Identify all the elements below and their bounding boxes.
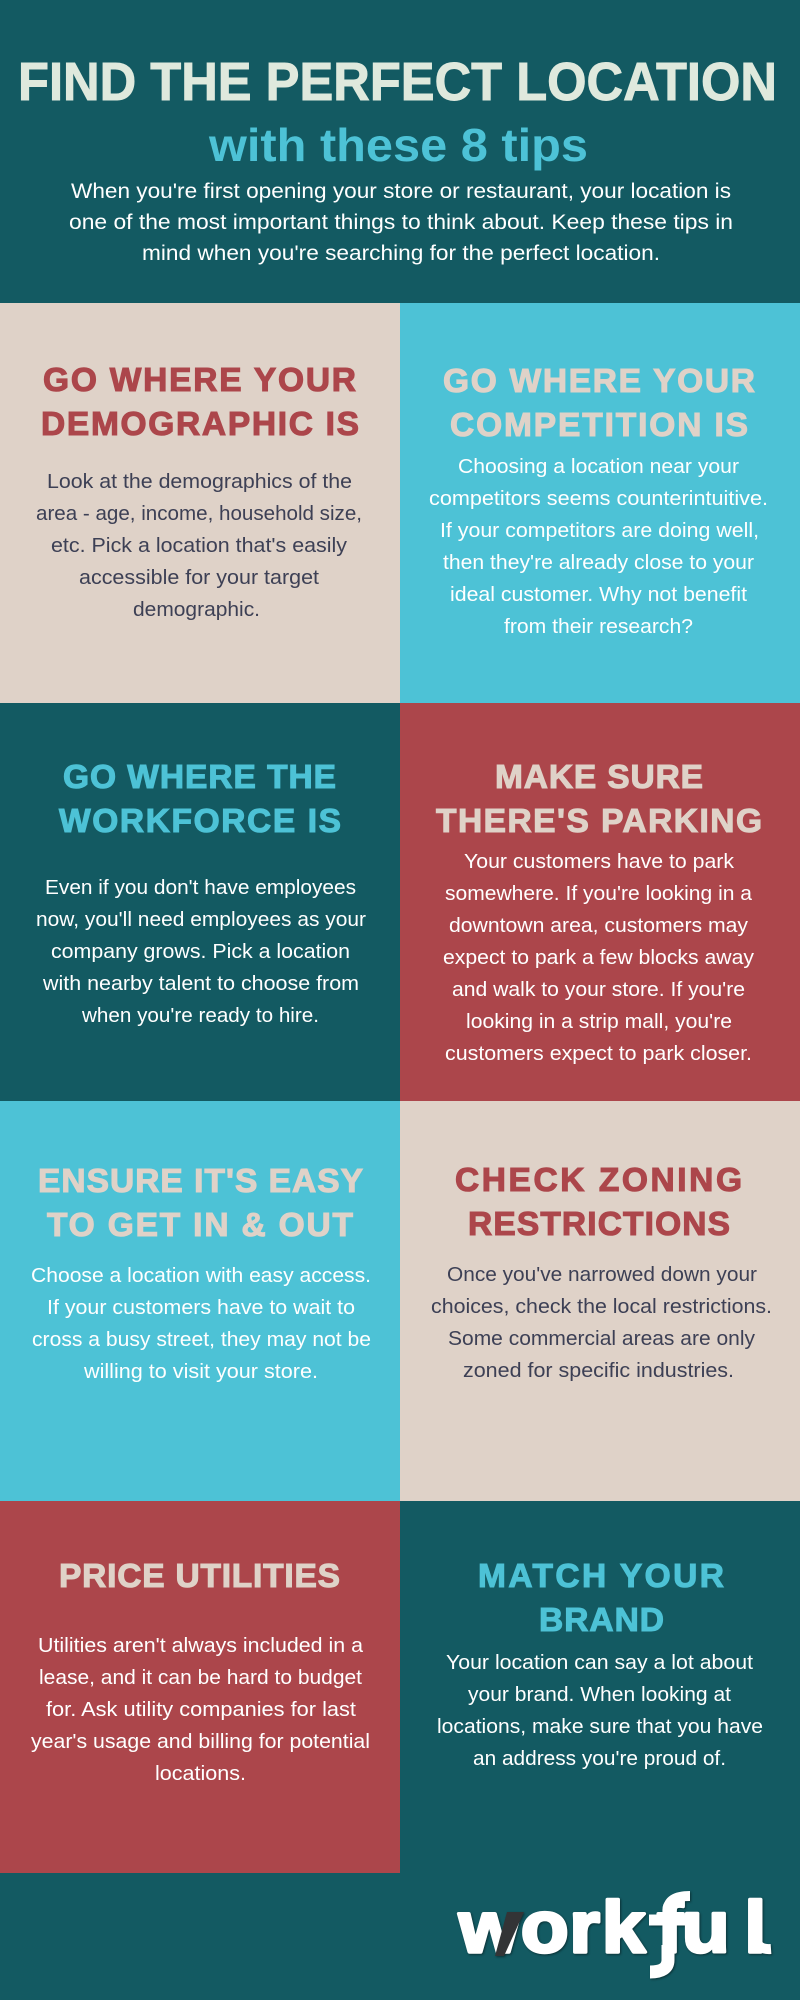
body text: your brand. When looking at: [468, 1683, 731, 1706]
panel: ensure it's easy to get in and out: [0, 1101, 400, 1501]
body text: from their research?: [504, 615, 693, 638]
heading: [41, 362, 359, 443]
body text: etc. Pick a location that's easily: [51, 534, 348, 557]
body text: Utilities aren't always included in a: [38, 1634, 364, 1657]
body text: choices, check the local restrictions.: [431, 1295, 772, 1318]
body text: Some commercial areas are only: [448, 1327, 756, 1350]
heading: THERE'S PARKING: [436, 803, 762, 840]
intro text: one of the most important things to think about. Keep these tips in: [69, 210, 733, 234]
body text: downtown area, customers may: [449, 914, 749, 937]
heading: PRICE UTILITIES: [59, 1558, 340, 1595]
body text: looking in a strip mall, you're: [466, 1010, 732, 1033]
heading: MAKE SURE: [495, 759, 703, 796]
body text: lease, and it can be hard to budget: [39, 1666, 362, 1689]
body text: If your competitors are doing well,: [440, 519, 759, 542]
heading: WORKFORCE IS: [59, 803, 341, 840]
heading: ENSURE IT'S EASY: [38, 1163, 363, 1200]
body text: customers expect to park closer.: [445, 1042, 752, 1065]
body text: willing to visit your store.: [83, 1360, 318, 1383]
heading: [38, 1163, 363, 1244]
body text: and walk to your store. If you're: [452, 978, 745, 1001]
body text: [36, 876, 366, 1027]
body text: year's usage and billing for potential: [31, 1730, 370, 1753]
body text: zoned for specific industries.: [463, 1359, 734, 1382]
heading: [478, 1558, 724, 1639]
body text: [429, 455, 768, 638]
body text: [31, 1264, 371, 1383]
body text: accessible for your target: [79, 566, 319, 589]
heading: TO GET IN & OUT: [47, 1207, 354, 1244]
body text: [31, 1634, 370, 1785]
panel: match your brand: [400, 1501, 800, 1873]
heading: MATCH YOUR: [478, 1558, 724, 1595]
heading: [455, 1162, 742, 1243]
heading: [443, 363, 755, 444]
body text: [431, 1263, 772, 1382]
body text: locations.: [155, 1762, 246, 1785]
body text: competitors seems counterintuitive.: [429, 487, 768, 510]
logo: workful: workful: [458, 1887, 766, 1967]
intro text: mind when you're searching for the perfect location.: [142, 241, 660, 265]
body text: with nearby talent to choose from: [42, 972, 359, 995]
heading: GO WHERE YOUR: [443, 363, 755, 400]
panel: price utilities: [0, 1501, 400, 1873]
body text: area - age, income, household size,: [36, 502, 362, 525]
body text: [437, 1651, 763, 1770]
heading: [436, 759, 762, 840]
heading: RESTRICTIONS: [468, 1206, 730, 1243]
body text: then they're already close to your: [443, 551, 754, 574]
body text: [36, 470, 362, 621]
body text: now, you'll need employees as your: [36, 908, 366, 931]
panel: go where your competition is: [400, 303, 800, 703]
heading: COMPETITION IS: [450, 407, 748, 444]
body text: Your customers have to park: [464, 850, 735, 873]
heading: DEMOGRAPHIC IS: [41, 406, 359, 443]
body text: Even if you don't have employees: [45, 876, 356, 899]
panel: go where your demographic is: [0, 303, 400, 703]
footer band: [0, 1873, 800, 2000]
body text: demographic.: [133, 598, 260, 621]
body text: Once you've narrowed down your: [447, 1263, 757, 1286]
intro text: [69, 179, 733, 265]
body text: locations, make sure that you have: [437, 1715, 763, 1738]
panel: make sure there's parking: [400, 703, 800, 1101]
body text: expect to park a few blocks away: [443, 946, 755, 969]
body text: when you're ready to hire.: [81, 1004, 319, 1027]
body text: cross a busy street, they may not be: [32, 1328, 371, 1351]
intro text: When you're first opening your store or restaurant, your location is: [71, 179, 731, 203]
heading: GO WHERE YOUR: [43, 362, 356, 399]
heading: BRAND: [539, 1602, 664, 1639]
body text: an address you're proud of.: [473, 1747, 726, 1770]
heading: GO WHERE THE: [63, 759, 336, 796]
body text: company grows. Pick a location: [51, 940, 350, 963]
panel: go where the workforce is: [0, 703, 400, 1101]
body text: Look at the demographics of the: [47, 470, 352, 493]
body text: Your location can say a lot about: [446, 1651, 753, 1674]
body text: somewhere. If you're looking in a: [445, 882, 753, 905]
body text: for. Ask utility companies for last: [46, 1698, 356, 1721]
body text: Choosing a location near your: [458, 455, 739, 478]
heading: [59, 759, 341, 840]
body text: If your customers have to wait to: [47, 1296, 355, 1319]
body text: ideal customer. Why not benefit: [450, 583, 747, 606]
subtitle: with these 8 tips: [208, 119, 588, 171]
body text: Choose a location with easy access.: [31, 1264, 371, 1287]
panel: check zoning restrictions: [400, 1101, 800, 1501]
heading: CHECK ZONING: [455, 1162, 742, 1199]
panel: header: [0, 0, 800, 303]
body text: [443, 850, 755, 1065]
